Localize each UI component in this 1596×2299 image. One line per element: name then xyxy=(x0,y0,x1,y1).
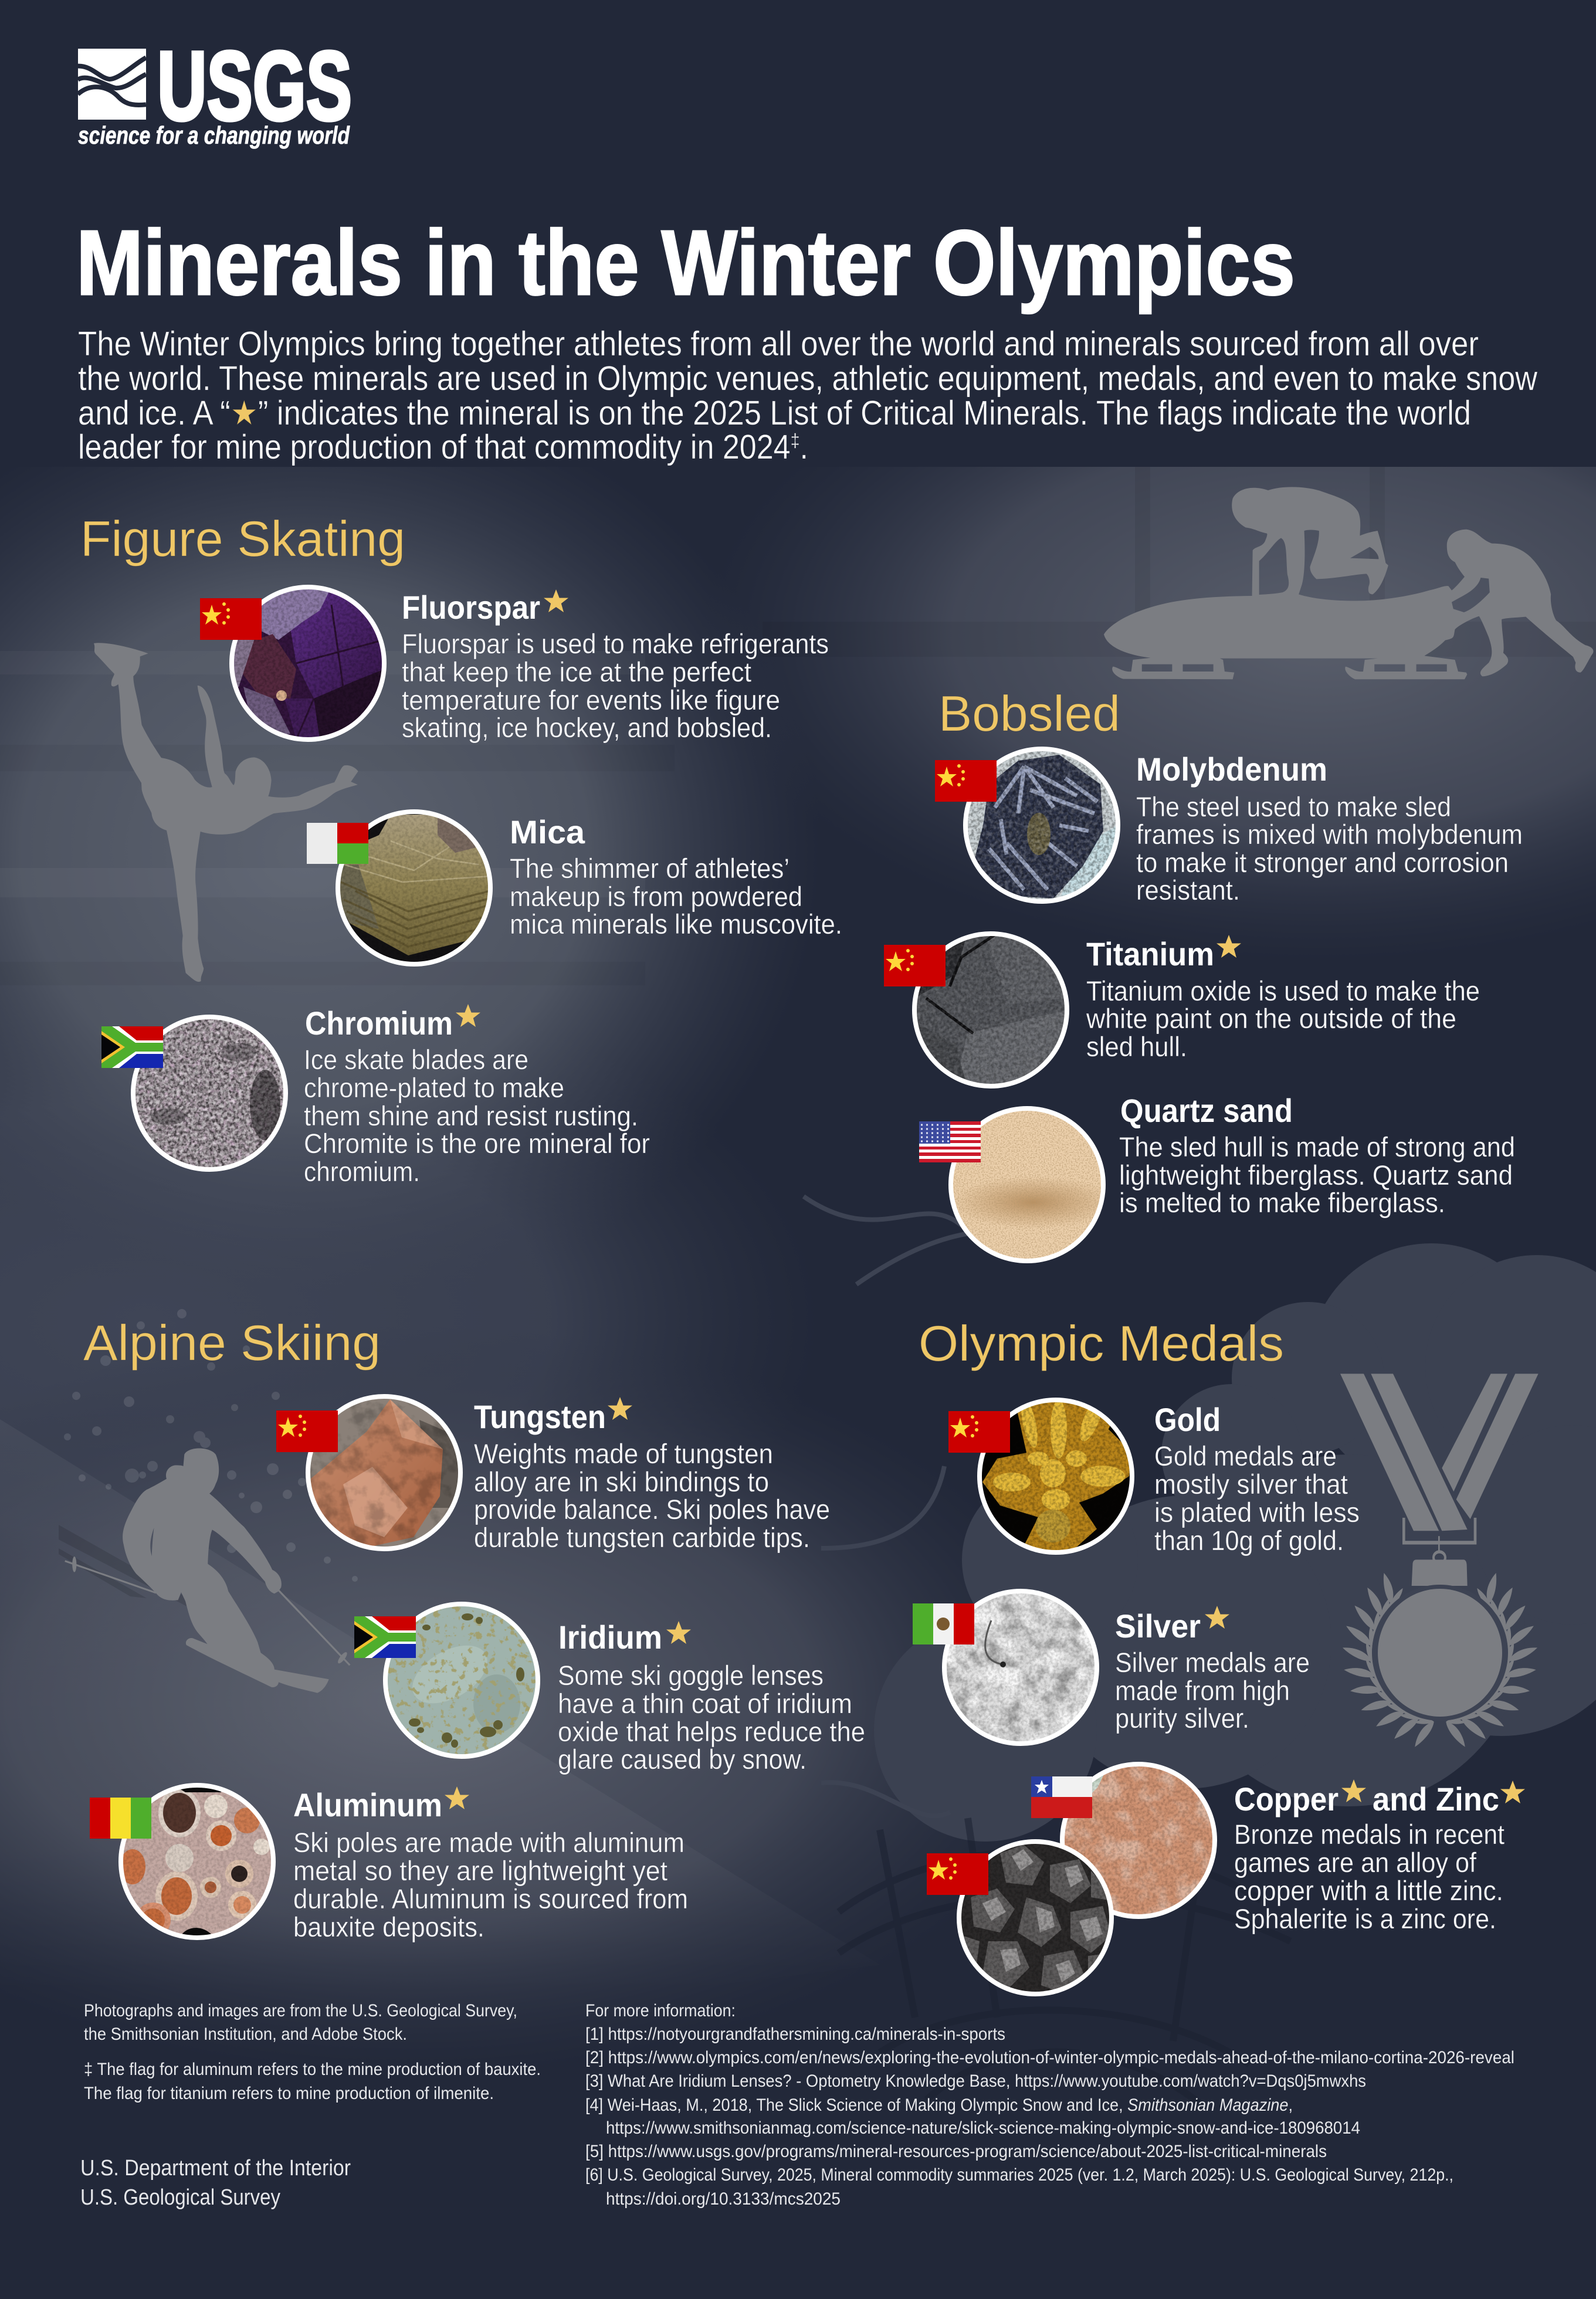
description: skating, ice hockey, and bobsled. xyxy=(402,712,772,743)
description: mostly silver that xyxy=(1154,1469,1348,1500)
intro text: ‡ xyxy=(791,430,800,451)
description: Weights made of tungsten xyxy=(474,1438,773,1469)
description: Ice skate blades are xyxy=(304,1044,528,1075)
mineral name: Aluminum: Aluminum xyxy=(293,1786,442,1823)
footer: references: [4] Wei-Haas, M., 2018, The Slick Science of Making Olympic Snow and Ice, Smithsonian Magazine, xyxy=(585,2095,1293,2115)
footer: references: [3] What Are Iridium Lenses? - Optometry Knowledge Base, https://www.youtube.com/watch?v=Dqs0j5mwxhs xyxy=(585,2071,1366,2091)
mineral photo: molybdenum xyxy=(965,749,1118,901)
description: to make it stronger and corrosion xyxy=(1136,847,1509,878)
panel: Figure Skating xyxy=(80,511,842,1187)
mineral photo: titanium xyxy=(914,934,1067,1086)
description: Chromite is the ore mineral for xyxy=(304,1128,650,1159)
description: chrome-plated to make xyxy=(304,1072,564,1103)
flag: South Africa xyxy=(354,1616,416,1658)
flag: China xyxy=(927,1853,988,1895)
critical mineral star xyxy=(666,1621,691,1644)
mineral name: Fluorspar: Fluorspar xyxy=(402,589,540,626)
footer: image credits: Photographs and images are from the U.S. Geological Survey, xyxy=(84,2001,517,2020)
description xyxy=(1119,1131,1515,1218)
medal disc xyxy=(1378,1589,1502,1717)
mineral name: Quartz sand: Quartz sand xyxy=(1120,1092,1293,1129)
description: durable tungsten carbide tips. xyxy=(474,1522,810,1553)
mineral photo: fluorspar xyxy=(232,587,384,740)
description: The shimmer of athletes’ xyxy=(510,853,789,884)
logo: USGS xyxy=(78,32,352,149)
mineral name: Tungsten: Tungsten xyxy=(474,1398,606,1435)
description: sled hull. xyxy=(1086,1031,1187,1062)
flag: Mexico xyxy=(913,1603,974,1644)
silhouette: skier xyxy=(65,1449,350,1693)
intro text: and ice. A “★” indicates the mineral is on the 2025 List of Critical Minerals. The flags indicate the world xyxy=(78,394,1471,432)
description: Sphalerite is a zinc ore. xyxy=(1234,1903,1496,1934)
flag: South Africa xyxy=(101,1026,163,1068)
mineral photo: copper xyxy=(1062,1764,1215,1917)
silhouette: bobsled team xyxy=(1104,487,1594,679)
description: them shine and resist rusting. xyxy=(304,1100,638,1131)
description: Gold medals are xyxy=(1154,1440,1337,1471)
description: frames is mixed with molybdenum xyxy=(1136,819,1523,850)
critical mineral star xyxy=(1205,1606,1229,1629)
description: is plated with less xyxy=(1154,1497,1360,1528)
mineral name: Iridium: Iridium xyxy=(558,1619,662,1656)
mineral photo: mica xyxy=(338,812,490,964)
ribbon xyxy=(1340,1374,1539,1586)
description xyxy=(402,628,829,743)
wordmark: USGS xyxy=(157,32,352,141)
intro text: leader for mine production of that commodity in 2024 xyxy=(78,428,872,466)
mineral photo: quartz sand xyxy=(951,1108,1115,1261)
description xyxy=(1115,1647,1310,1734)
flag: Madagascar xyxy=(307,823,368,864)
mineral name: Copper and Zinc xyxy=(1234,1781,1499,1818)
mineral photo: iridium xyxy=(385,1604,538,1757)
flag: China xyxy=(884,945,946,986)
mineral photo: silver xyxy=(944,1591,1097,1744)
silhouette: figure skater xyxy=(94,643,358,982)
description: Fluorspar is used to make refrigerants xyxy=(402,628,829,659)
mineral name: Molybdenum: Molybdenum xyxy=(1136,751,1327,788)
description: is melted to make fiberglass. xyxy=(1119,1187,1445,1218)
mineral name: Chromium: Chromium xyxy=(305,1005,453,1042)
description: temperature for events like figure xyxy=(402,684,780,716)
footer: agency xyxy=(80,2156,351,2210)
description: Titanium oxide is used to make the xyxy=(1086,975,1480,1006)
mineral name: Mica: Mica xyxy=(510,813,585,850)
flag: China xyxy=(276,1410,338,1452)
footer: image credits xyxy=(84,2001,541,2103)
description: purity silver. xyxy=(1115,1703,1249,1734)
mineral photo: gold xyxy=(980,1397,1132,1552)
footer: image credits: ‡ The flag for aluminum refers to the mine production of bauxite. xyxy=(84,2060,541,2079)
description xyxy=(558,1660,865,1775)
footer: references: [6] U.S. Geological Survey, 2025, Mineral commodity summaries 2025 (ver. 1.2, March 2025): U.S. Geological Survey, 212p., xyxy=(585,2165,1453,2185)
heading: Figure Skating xyxy=(80,511,405,567)
description xyxy=(1086,975,1480,1062)
description: than 10g of gold. xyxy=(1154,1525,1344,1556)
footer: image credits: the Smithsonian Institution, and Adobe Stock. xyxy=(84,2025,407,2044)
description xyxy=(293,1827,688,1942)
description: bauxite deposits. xyxy=(293,1911,484,1942)
description xyxy=(304,1044,650,1187)
description xyxy=(474,1438,830,1553)
flag: Chile xyxy=(1031,1776,1092,1818)
description: durable. Aluminum is sourced from xyxy=(293,1883,688,1914)
background xyxy=(0,467,1596,2013)
description: resistant. xyxy=(1136,874,1240,906)
footer: references: https://www.smithsonianmag.com/science-nature/slick-science-making-olympic-snow-and-ice-180968014 xyxy=(606,2118,1360,2138)
description: chromium. xyxy=(304,1156,420,1187)
footer: image credits: The flag for titanium refers to mine production of ilmenite. xyxy=(84,2084,494,2103)
description: that keep the ice at the perfect xyxy=(402,656,751,687)
description: The sled hull is made of strong and xyxy=(1119,1131,1515,1162)
description xyxy=(1136,791,1523,906)
medal ring xyxy=(1372,1585,1508,1721)
heading: Bobsled xyxy=(938,686,1120,742)
description: provide balance. Ski poles have xyxy=(474,1494,830,1525)
laurel wreath xyxy=(1340,1569,1540,1750)
logo mark: waves xyxy=(78,49,146,120)
heading: Olympic Medals xyxy=(919,1316,1284,1372)
critical mineral star: copper xyxy=(1341,1779,1366,1802)
flag: China xyxy=(935,760,997,802)
description xyxy=(1234,1819,1504,1934)
panel: Olympic Medals xyxy=(913,1316,1525,1994)
description: lightweight fiberglass. Quartz sand xyxy=(1119,1159,1513,1191)
title: Minerals in the Winter Olympics xyxy=(76,212,1295,314)
panel: Alpine Skiing xyxy=(83,1315,865,1942)
description: Ski poles are made with aluminum xyxy=(293,1827,685,1858)
mineral name: Copper and Zinc: and Zinc xyxy=(1373,1781,1499,1818)
flag: United States xyxy=(919,1121,981,1162)
critical mineral star xyxy=(1217,935,1241,958)
critical mineral star xyxy=(544,589,568,612)
description xyxy=(510,853,842,940)
footer: references: https://doi.org/10.3133/mcs2025 xyxy=(606,2189,841,2209)
description: Some ski goggle lenses xyxy=(558,1660,824,1691)
description: makeup is from powdered xyxy=(510,881,802,912)
critical mineral star xyxy=(445,1786,469,1809)
description: metal so they are lightweight yet xyxy=(293,1855,667,1886)
intro text xyxy=(78,325,1538,466)
footer: references: [1] https://notyourgrandfathersmining.ca/minerals-in-sports xyxy=(585,2025,1005,2044)
mineral photo: tungsten xyxy=(308,1396,460,1549)
flag: Guinea xyxy=(90,1798,151,1839)
mineral name: Titanium: Titanium xyxy=(1086,935,1214,972)
flag: China xyxy=(200,598,262,640)
footer: agency: U.S. Geological Survey xyxy=(80,2185,280,2210)
footer: references: [2] https://www.olympics.com/en/news/exploring-the-evolution-of-winter-olympic-medals-ahead-of-the-milano-cortina-2026-reveal xyxy=(585,2048,1514,2067)
mineral photo: chromium xyxy=(133,1017,286,1169)
mineral name: Copper and Zinc: Copper xyxy=(1234,1781,1339,1818)
mineral photo: zinc (sphalerite) xyxy=(959,1842,1112,1994)
footer: references: For more information: xyxy=(585,2001,736,2020)
mineral photo: aluminum (bauxite) xyxy=(120,1785,273,1938)
mineral name: Silver: Silver xyxy=(1115,1608,1201,1644)
description: games are an alloy of xyxy=(1234,1847,1477,1878)
flag: China xyxy=(948,1411,1010,1453)
intro text: . xyxy=(800,428,808,466)
description: The steel used to make sled xyxy=(1136,791,1451,822)
description: Bronze medals in recent xyxy=(1234,1819,1504,1850)
footer: references xyxy=(585,2001,1514,2209)
tagline: science for a changing world xyxy=(78,121,350,149)
silhouette: medal xyxy=(1340,1374,1540,1750)
mineral name: Gold: Gold xyxy=(1154,1401,1221,1438)
footer: references: [5] https://www.usgs.gov/programs/mineral-resources-program/science/about-2025-list-critical-minerals xyxy=(585,2142,1327,2161)
description: made from high xyxy=(1115,1675,1290,1706)
description: glare caused by snow. xyxy=(558,1744,807,1775)
description: have a thin coat of iridium xyxy=(558,1688,852,1719)
critical mineral star xyxy=(456,1004,480,1027)
description: mica minerals like muscovite. xyxy=(510,908,842,940)
description xyxy=(1154,1440,1360,1556)
description: oxide that helps reduce the xyxy=(558,1716,865,1747)
intro text: The Winter Olympics bring together athletes from all over the world and minerals sourced from all over xyxy=(78,325,1479,363)
critical mineral star xyxy=(608,1397,632,1420)
description: white paint on the outside of the xyxy=(1086,1003,1456,1034)
panel: Bobsled xyxy=(884,686,1523,1261)
heading: Alpine Skiing xyxy=(83,1315,381,1371)
critical mineral star: zinc xyxy=(1500,1781,1525,1803)
description: alloy are in ski bindings to xyxy=(474,1466,769,1497)
footer: agency: U.S. Department of the Interior xyxy=(80,2156,351,2181)
description: Silver medals are xyxy=(1115,1647,1310,1678)
description: copper with a little zinc. xyxy=(1234,1875,1503,1906)
